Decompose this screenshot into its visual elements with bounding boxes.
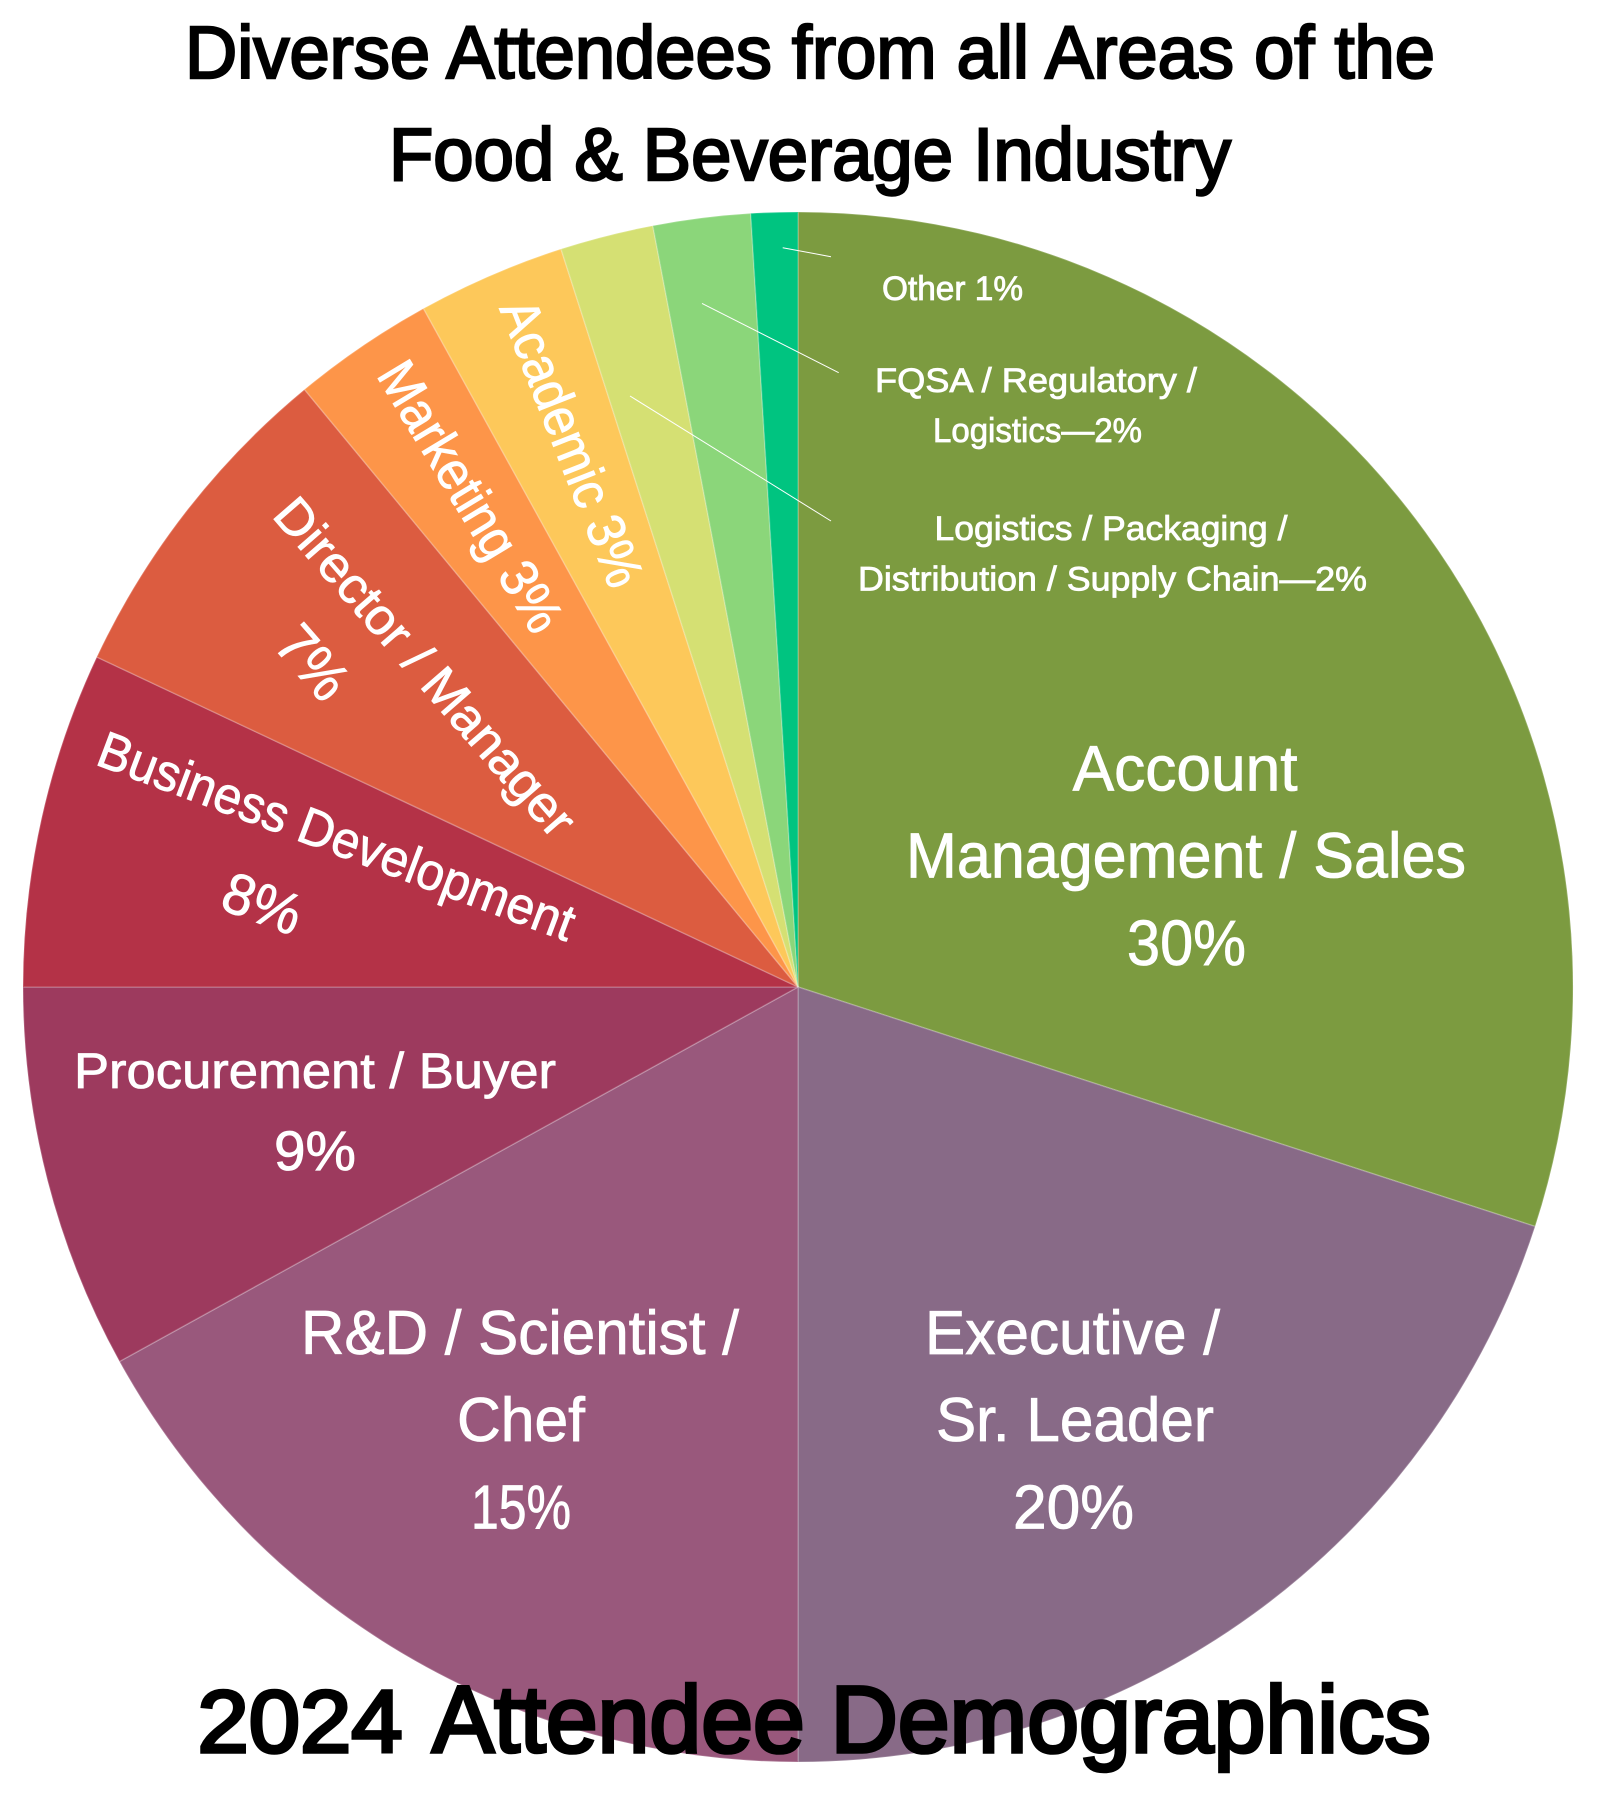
leader line: Other bbox=[783, 248, 831, 257]
label: Executive / Sr. Leader 20% bbox=[925, 1299, 1221, 1543]
label: Executive / Sr. Leader 20%: Sr. Leader bbox=[936, 1386, 1214, 1455]
label: Procurement / Buyer 9%: 9% bbox=[274, 1119, 356, 1182]
label: Logistics / Packaging / Distribution / Supply Chain 2% bbox=[858, 510, 1367, 599]
slice: FQSA / Regulatory / Logistics 2% bbox=[653, 213, 798, 987]
slice: Executive / Sr. Leader 20% bbox=[798, 987, 1535, 1762]
label: Procurement / Buyer 9% bbox=[74, 1043, 556, 1182]
label: Account Management / Sales 30%: Account bbox=[1073, 733, 1298, 805]
label: Logistics / Packaging / Distribution / Supply Chain 2%: Distribution / Supply Chain—2% bbox=[858, 561, 1367, 599]
slice: Other 1% bbox=[751, 212, 798, 987]
slice: Logistics / Packaging / Distribution / Supply Chain 2% bbox=[561, 226, 798, 987]
label: R&D / Scientist / Chef 15%: R&D / Scientist / bbox=[301, 1299, 740, 1368]
label: Executive / Sr. Leader 20%: Executive / bbox=[925, 1299, 1221, 1368]
label: Marketing 3%: Marketing 3% bbox=[365, 350, 575, 643]
label: Account Management / Sales 30%: Management / Sales bbox=[906, 820, 1466, 892]
label: Procurement / Buyer 9%: Procurement / Buyer bbox=[74, 1043, 556, 1099]
bottom heading: Attendee Demographics bbox=[432, 1667, 1431, 1773]
slice: R&D / Scientist / Chef 15% bbox=[120, 987, 798, 1762]
label: Business Development 8%: 8% bbox=[213, 859, 311, 948]
slice: Marketing 3% bbox=[304, 308, 798, 987]
label: R&D / Scientist / Chef 15%: Chef bbox=[457, 1386, 586, 1455]
label: FQSA / Regulatory / Logistics 2%: FQSA / Regulatory / bbox=[875, 362, 1198, 400]
title bbox=[185, 11, 1435, 196]
slice: Director / Manager 7% bbox=[97, 390, 798, 987]
slice: Academic 3% bbox=[424, 249, 798, 987]
label: Executive / Sr. Leader 20%: 20% bbox=[1013, 1474, 1134, 1543]
label: R&D / Scientist / Chef 15%: 15% bbox=[471, 1474, 571, 1543]
label: Account Management / Sales 30%: 30% bbox=[1127, 907, 1246, 979]
label: Director / Manager 7%: Director / Manager bbox=[263, 486, 588, 848]
label: FQSA / Regulatory / Logistics 2%: Logistics—2% bbox=[933, 412, 1142, 450]
slice: Procurement / Buyer 9% bbox=[23, 987, 798, 1362]
label: Logistics / Packaging / Distribution / Supply Chain 2%: Logistics / Packaging / bbox=[934, 510, 1288, 548]
label: Business Development 8%: Business Development bbox=[90, 721, 583, 953]
title: Food & Beverage Industry bbox=[389, 113, 1231, 196]
slice: Business Development 8% bbox=[23, 657, 798, 987]
label: Academic 3%: Academic 3% bbox=[488, 291, 655, 596]
slice: Account Management / Sales 30% bbox=[798, 212, 1573, 1226]
label: Director / Manager 7%: 7% bbox=[262, 612, 362, 713]
label: Other 1%: Other 1% bbox=[882, 270, 1023, 308]
label: R&D / Scientist / Chef 15% bbox=[301, 1299, 740, 1543]
label: FQSA / Regulatory / Logistics 2% bbox=[875, 362, 1198, 450]
label: Account Management / Sales 30% bbox=[906, 733, 1466, 979]
leader line: FQSA bbox=[702, 303, 839, 373]
bottom heading: 2024 bbox=[198, 1672, 402, 1771]
leader line: Logistics bbox=[630, 396, 831, 521]
title: Diverse Attendees from all Areas of the bbox=[185, 11, 1435, 94]
